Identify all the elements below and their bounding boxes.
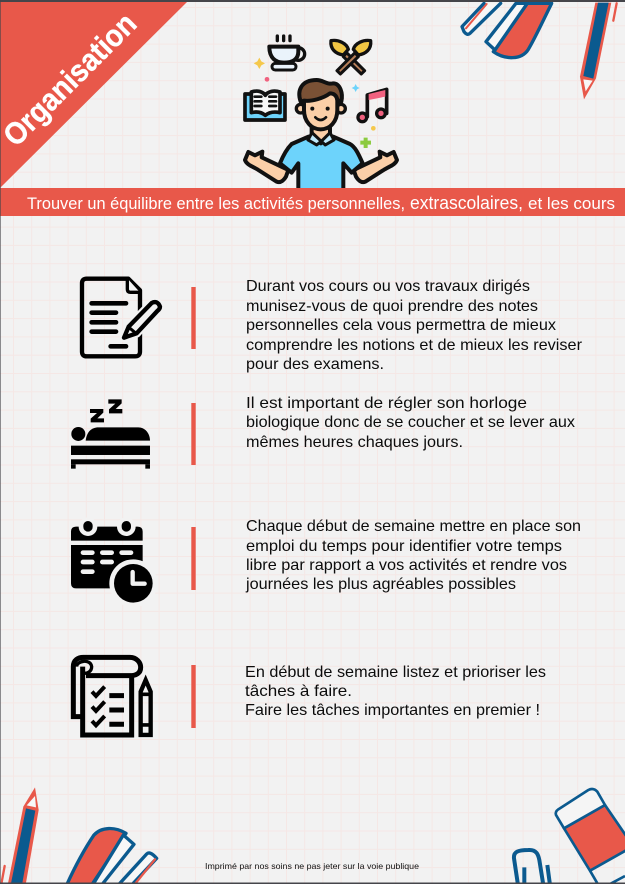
icon: calendar and clock — [71, 517, 157, 607]
text: notes: personnelles cela vous permettra de mieux — [246, 317, 556, 334]
text: tasks: tâches à faire. — [245, 683, 352, 700]
icon: document and pen — [82, 278, 160, 356]
icon: coffee cup — [269, 36, 305, 70]
banner text: Trouver un équilibre entre les activités personnelles, — [27, 194, 405, 213]
text: sleep: Il est important de régler son horloge — [246, 395, 527, 412]
icon: sparkles — [254, 58, 376, 148]
divider bar — [191, 403, 196, 465]
text: sleep: biologique donc de se coucher et se lever aux — [246, 414, 575, 431]
text: tasks: En début de semaine listez et prioriser les — [245, 664, 546, 681]
text: schedule: libre par rapport a vos activités et rendre vos — [246, 557, 567, 574]
divider bar — [191, 287, 196, 349]
person — [245, 80, 397, 190]
row: sleep — [71, 395, 579, 469]
text: schedule: emploi du temps pour identifier votre temps — [246, 538, 562, 555]
decoration: bottom right paperclip — [514, 850, 550, 884]
decoration: bottom right eraser — [556, 789, 625, 884]
text: sleep: mêmes heures chaques jours. — [246, 434, 463, 451]
row: schedule — [71, 517, 585, 607]
decoration: top right pencil — [580, 3, 617, 99]
icon: sleeping in bed — [71, 399, 150, 469]
decoration: top right book — [462, 3, 552, 58]
text: notes: munisez-vous de quoi prendre des notes — [246, 298, 538, 315]
divider bar — [191, 665, 196, 728]
text: notes: pour des examens. — [246, 356, 384, 373]
text: notes: Durant vos cours ou vos travaux dirigés — [246, 278, 530, 295]
banner text: et les cours — [528, 194, 615, 213]
decoration: bottom left book — [67, 829, 157, 884]
corner ribbon — [0, 2, 187, 188]
text: tasks: Faire les tâches importantes en premier ! — [245, 702, 540, 719]
banner text: extrascolaires, — [410, 193, 523, 213]
icon: music notes — [358, 89, 387, 122]
footer note: Imprimé par nos soins ne pas jeter sur la voie publique — [205, 861, 419, 871]
row: notes — [82, 278, 586, 373]
text: schedule: journées les plus agréables possibles — [245, 576, 516, 593]
icon: crossed paint brushes — [331, 40, 371, 74]
illustration: person juggling hobbies — [245, 36, 397, 190]
text: notes: comprendre les notions et de mieux les reviser — [246, 337, 583, 354]
decoration: bottom left pencil — [1, 787, 39, 884]
icon: open book — [245, 91, 285, 120]
text: schedule: Chaque début de semaine mettre en place son — [246, 518, 581, 535]
banner — [0, 188, 625, 216]
icon: checklist scroll and pencil — [73, 657, 151, 735]
divider bar — [191, 527, 196, 590]
row: tasks — [73, 657, 550, 735]
